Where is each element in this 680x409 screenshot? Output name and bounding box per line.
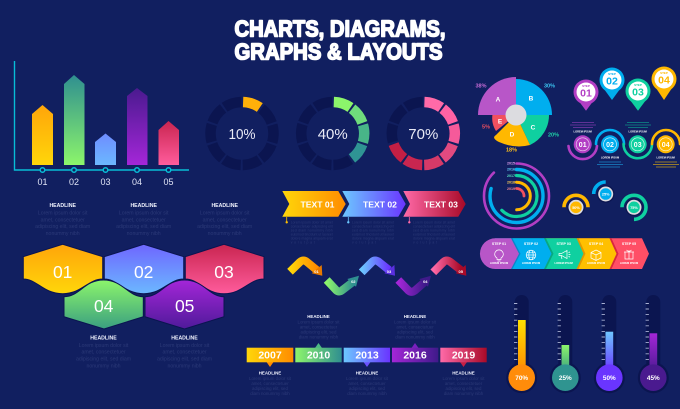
honeycomb diagram xyxy=(23,244,264,329)
thermometer 70% xyxy=(506,295,537,393)
step 03 xyxy=(544,238,586,269)
slice E xyxy=(492,115,516,131)
timeline note 2010: adipiscing elit, sed xyxy=(301,329,337,334)
text block: headline 5 xyxy=(157,336,212,369)
bar 02 xyxy=(64,75,84,165)
step 03: LOREM IPSUM xyxy=(555,261,573,265)
pin 04 xyxy=(652,66,676,100)
text block: headline 4: Lorem ipsum dolor sit xyxy=(79,343,129,349)
pie percent labels: 30% xyxy=(544,84,555,90)
ring 02: 02 xyxy=(606,142,614,149)
timeline note 2007: Lorem ipsum dolor sit xyxy=(249,376,292,381)
arrow banner: text 03: euismod tincidunt ut laoreet xyxy=(413,232,455,236)
wave arrow 02 xyxy=(327,276,359,292)
timeline note 2013: amet, consectetuer xyxy=(348,381,386,386)
arrow banner: text 02: Lorem ipsum dolor sit amet xyxy=(352,220,394,224)
timeline note 2010: amet, consectetuer xyxy=(300,324,338,329)
bar 05 xyxy=(158,121,179,165)
pie letters: D xyxy=(510,132,515,138)
pie letters: E xyxy=(498,118,503,126)
year 2010 xyxy=(295,343,342,362)
wave arrow 04: 04 xyxy=(423,279,428,284)
bar 04 xyxy=(127,88,148,165)
timeline note 2019 xyxy=(443,370,485,396)
timeline note 2010 xyxy=(298,314,340,339)
donut 10% xyxy=(209,101,275,166)
step 03: STEP 03 xyxy=(557,242,571,246)
hexagon 03 xyxy=(185,244,264,294)
timeline note 2007: amet, consectetuer xyxy=(251,381,289,386)
step ribbon xyxy=(480,238,649,269)
pin 02: 02 xyxy=(606,76,618,88)
slice C xyxy=(516,115,549,145)
year 2010: 2010 xyxy=(307,350,330,362)
axis labels: 03 xyxy=(100,177,111,187)
text block: headline 3: nonummy nibh xyxy=(208,231,242,237)
arrow banner: text 03: Lorem ipsum dolor sit amet xyxy=(413,220,455,224)
text block: headline 5: HEADLINE xyxy=(171,336,198,342)
gauge 50%: 50% xyxy=(572,206,580,210)
wave arrow 02: 02 xyxy=(351,279,356,284)
timeline note 2010: HEADLINE xyxy=(307,314,330,319)
hexagon 02 xyxy=(104,244,184,294)
text block: headline 5: adipiscing elit, sed diam xyxy=(157,356,212,362)
ring captions: LOREM IPSUM xyxy=(574,130,592,134)
year 2007 xyxy=(247,348,293,367)
wave arrow 05: 05 xyxy=(458,269,464,274)
axis markers xyxy=(40,168,171,172)
text block: headline 2: HEADLINE xyxy=(130,203,157,209)
year 2016 xyxy=(392,343,438,362)
arrow banner: text 01: TEXT 01 xyxy=(301,199,335,209)
pie hub xyxy=(506,104,526,126)
arrow banner: text 01: euismod tincidunt ut laoreet xyxy=(291,232,333,236)
wave arrow 04 xyxy=(398,276,431,292)
ring 04: 04 xyxy=(662,142,670,149)
axis labels: 01 xyxy=(37,177,48,187)
timeline note 2007: HEADLINE xyxy=(259,370,281,376)
pie letters: B xyxy=(529,96,534,102)
pin 01: 01 xyxy=(580,88,592,100)
hexagon 02: 02 xyxy=(134,262,153,282)
gauge 25%: 25% xyxy=(602,192,610,196)
arrow banner: text 02 xyxy=(342,191,406,244)
text block: headline 2 xyxy=(116,203,171,237)
arrow banner: text 01: sed diam nonummy nibh xyxy=(291,228,333,232)
text block: headline 2: nonummy nibh xyxy=(127,231,161,237)
process ring timeline xyxy=(568,122,680,167)
timeline note 2016: diam nonummy nibh xyxy=(395,334,435,339)
text block: headline 4: nonummy nibh xyxy=(86,363,121,369)
pie letters: A xyxy=(496,96,501,104)
timeline note 2013: HEADLINE xyxy=(356,370,378,376)
title: GRAPHS & LAYOUTS xyxy=(234,38,442,64)
hexagon 01 xyxy=(23,244,103,294)
step 01: STEP 01 xyxy=(492,242,506,246)
ring captions: LOREM IPSUM xyxy=(601,156,619,160)
year 2019: 2019 xyxy=(452,350,475,362)
radial chart year labels: 2019 xyxy=(507,187,515,191)
pie percent labels xyxy=(475,84,559,154)
text block: headline 1: nonummy nibh xyxy=(46,231,80,237)
timeline note 2019: amet, consectetuer xyxy=(445,381,483,386)
radial chart year labels: 2015 xyxy=(507,162,515,166)
timeline note 2013 xyxy=(346,370,389,396)
donut 40% xyxy=(288,89,377,178)
gauge 75%: 75% xyxy=(630,206,638,210)
radial progress chart xyxy=(484,162,549,228)
thermometer 25%: 25% xyxy=(559,375,572,382)
timeline xyxy=(247,343,487,367)
arrow banner: text 01: Lorem ipsum dolor sit amet xyxy=(291,220,333,224)
wave arrow 05 xyxy=(433,260,466,276)
donut 70%: 70% xyxy=(408,126,438,143)
step 05: STEP 05 xyxy=(622,242,636,246)
year 2016: 2016 xyxy=(403,350,427,362)
pin 04: STEP xyxy=(660,71,668,75)
pin 02 xyxy=(600,68,624,100)
ring captions xyxy=(570,122,679,167)
thermometer 25% xyxy=(550,295,581,393)
pie percent labels: 5% xyxy=(482,124,490,130)
timeline note 2019: Lorem ipsum dolor sit xyxy=(443,376,485,381)
donut 10%: 10% xyxy=(228,126,256,143)
arrow banner: text 03: sed diam nonummy nibh xyxy=(413,228,455,232)
hexagon 04: 04 xyxy=(94,296,114,316)
timeline note 2016: Lorem ipsum dolor sit xyxy=(394,319,437,324)
timeline note 2019: adipiscing elit, sed xyxy=(446,386,482,391)
radial chart year labels: 2017 xyxy=(507,174,515,178)
radial chart year labels: 2018 xyxy=(507,180,515,184)
timeline note 2013: Lorem ipsum dolor sit xyxy=(346,376,389,381)
thermometer 50%: 50% xyxy=(603,375,616,382)
thermometer 45% xyxy=(638,295,669,393)
year 2013: 2013 xyxy=(355,350,379,362)
text block: headline 4: HEADLINE xyxy=(90,336,117,342)
slice A xyxy=(478,77,516,115)
axis labels xyxy=(37,177,174,187)
text block: headline 4 xyxy=(76,336,131,369)
text block: headline 5: Lorem ipsum dolor sit xyxy=(160,343,210,349)
ring captions: LOREM IPSUM xyxy=(657,156,675,160)
step 04: STEP 04 xyxy=(589,242,603,246)
hexagon 03: 03 xyxy=(214,262,234,282)
text block: headline 5: amet, consectetuer xyxy=(162,350,207,356)
text block: headline 1: Lorem ipsum dolor sit xyxy=(38,210,88,216)
year 2007: 2007 xyxy=(258,350,282,362)
bar chart xyxy=(14,61,189,187)
arrow banner: text 03: dolore magna aliquam erat xyxy=(413,236,455,240)
bar 01 xyxy=(32,105,53,165)
step 02 xyxy=(511,238,554,269)
step 01: LOREM IPSUM xyxy=(490,261,508,265)
wave arrow 03 xyxy=(362,260,395,276)
arrow banner: text 01 xyxy=(282,191,346,244)
hexagon 01: 01 xyxy=(53,262,72,282)
text block: headline 2: Lorem ipsum dolor sit xyxy=(119,210,169,216)
axis labels: 04 xyxy=(132,177,142,187)
pie letters: C xyxy=(531,124,536,132)
arrow banner: text 01: consectetuer adipiscing elit xyxy=(291,224,333,228)
thermometer 70%: 70% xyxy=(515,375,528,382)
ring 03: 03 xyxy=(634,142,642,149)
text block: headline 4: amet, consectetuer xyxy=(81,350,126,356)
slice D xyxy=(494,115,530,146)
ring captions: LOREM IPSUM xyxy=(629,130,647,134)
step 05 xyxy=(610,238,649,269)
pie percent labels: 20% xyxy=(548,132,559,138)
gauge 25% xyxy=(594,182,618,206)
title: CHARTS, DIAGRAMS, xyxy=(234,16,446,42)
bar 03 xyxy=(95,134,116,165)
text block: headline 1: amet, consectetuer xyxy=(41,217,85,223)
arrow banner: text 02: dolore magna aliquam erat xyxy=(352,236,394,240)
pin 01 xyxy=(574,80,598,111)
axis labels: 05 xyxy=(163,177,174,187)
timeline note 2019: diam nonummy nibh xyxy=(444,391,484,396)
timeline note 2010: Lorem ipsum dolor sit xyxy=(298,319,340,324)
pie letters xyxy=(496,96,536,138)
step 04: LOREM IPSUM xyxy=(587,261,605,265)
year 2019 xyxy=(440,348,487,367)
text block: headline 3: adipiscing elit, sed diam xyxy=(197,224,252,230)
thermometer 50% xyxy=(594,295,625,393)
text block: headline 2: amet, consectetuer xyxy=(122,217,166,223)
timeline note 2019: HEADLINE xyxy=(452,370,475,376)
hexagon 04 xyxy=(64,280,143,329)
connector arcs xyxy=(568,130,680,159)
hexagon 05: 05 xyxy=(175,296,194,316)
radial chart year labels: 2016 xyxy=(507,168,515,172)
arrow banner: text 02: sed diam nonummy nibh xyxy=(352,228,394,232)
timeline note 2016: HEADLINE xyxy=(404,314,426,319)
title xyxy=(234,16,446,64)
text block: headline 3: amet, consectetuer xyxy=(203,217,247,223)
arrow banner: text 01: volutpat xyxy=(291,240,315,244)
step 02: LOREM IPSUM xyxy=(522,261,540,265)
arrow banner: text 03: volutpat xyxy=(413,240,437,244)
ring 01: 01 xyxy=(579,142,587,149)
pin 02: STEP xyxy=(608,72,616,76)
gauge 50% xyxy=(564,195,588,219)
pin 03: 03 xyxy=(632,86,644,98)
pie percent labels: 38% xyxy=(475,84,487,90)
pie chart xyxy=(475,77,559,154)
donut 70% xyxy=(379,89,468,178)
arrow banner: text 02: volutpat xyxy=(352,240,376,244)
radial chart year labels xyxy=(507,162,515,191)
pin 03 xyxy=(626,78,650,111)
timeline note 2007: adipiscing elit, sed xyxy=(252,386,288,391)
step 04 xyxy=(577,238,618,269)
timeline note 2010: diam nonummy nibh xyxy=(299,334,339,339)
timeline note 2007 xyxy=(249,370,292,396)
slice B xyxy=(516,79,552,115)
arrow banner: text 02: euismod tincidunt ut laoreet xyxy=(352,232,394,236)
text block: headline 3: HEADLINE xyxy=(211,203,238,209)
step 05: LOREM IPSUM xyxy=(620,261,638,265)
text block: headline 1: HEADLINE xyxy=(49,203,76,209)
hexagon 05 xyxy=(145,280,224,329)
arrow banner: text 03: consectetuer adipiscing elit xyxy=(413,224,455,228)
text block: headline 1 xyxy=(35,203,90,237)
timeline note 2013: diam nonummy nibh xyxy=(347,391,387,396)
wave arrow 03: 03 xyxy=(387,269,392,274)
step 01 xyxy=(480,238,520,269)
timeline note 2013: adipiscing elit, sed xyxy=(349,386,385,391)
text block: headline 5: nonummy nibh xyxy=(167,363,202,369)
donut 40%: 40% xyxy=(318,126,348,143)
year 2013 xyxy=(344,348,390,367)
text block: headline 2: adipiscing elit, sed diam xyxy=(116,224,171,230)
axis labels: 02 xyxy=(69,177,79,187)
pie percent labels: 18% xyxy=(506,148,517,154)
arrow banner: text 01: dolore magna aliquam erat xyxy=(291,236,333,240)
timeline note 2016: amet, consectetuer xyxy=(396,324,434,329)
text block: headline 1: adipiscing elit, sed diam xyxy=(35,224,90,230)
pin 01: STEP xyxy=(582,84,590,88)
wave arrow 01: 01 xyxy=(314,269,319,274)
timeline note 2016: adipiscing elit, sed xyxy=(397,329,433,334)
arrow banner: text 02: TEXT 02 xyxy=(363,199,397,209)
timeline note 2007: diam nonummy nibh xyxy=(250,391,290,396)
gauge 75% xyxy=(622,195,646,219)
step 02: STEP 02 xyxy=(524,242,538,246)
arrow banner: text 03 xyxy=(403,191,466,244)
thermometer 45%: 45% xyxy=(647,375,660,382)
timeline note 2016 xyxy=(394,314,437,339)
text block: headline 4: adipiscing elit, sed diam xyxy=(76,356,131,362)
arrow banner: text 03: TEXT 03 xyxy=(424,199,458,209)
text block: headline 3: Lorem ipsum dolor sit xyxy=(200,210,250,216)
wave arrow 01 xyxy=(290,260,322,276)
pin 04: 04 xyxy=(658,74,670,86)
arrow banner: text 02: consectetuer adipiscing elit xyxy=(352,224,394,228)
pin 03: STEP xyxy=(634,83,642,87)
text block: headline 3 xyxy=(197,203,252,237)
